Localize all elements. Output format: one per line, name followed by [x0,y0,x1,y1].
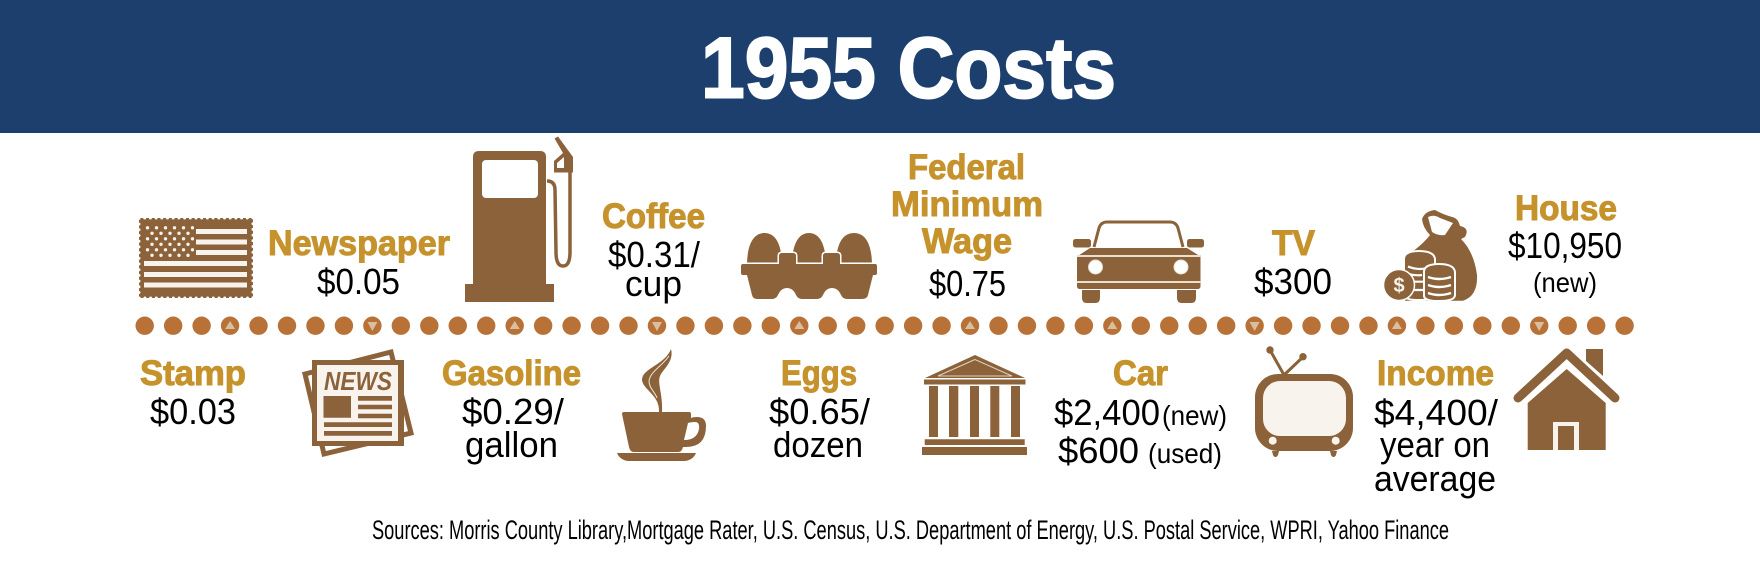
label: car: $600 [1058,430,1139,471]
label: federal minimum wage: Wage [922,222,1012,261]
icon text: dollar sign: $ [1394,275,1405,297]
label: gasoline: gallon [465,424,558,465]
label: house: (new) [1533,267,1597,298]
icon: house [1518,349,1615,450]
label: coffee: cup [625,263,682,304]
label: newspaper: Newspaper [268,224,450,263]
icon: newspaper [305,352,411,454]
title: 1955 Costs [701,20,1116,116]
label: income: average [1374,458,1496,499]
label: car: Car [1113,354,1168,393]
label: stamp: $0.03 [150,391,236,432]
label: TV: $300 [1254,261,1332,302]
icon: government building [922,355,1027,455]
label: house: House [1515,189,1617,228]
icon: gas pump [465,136,573,302]
label: TV [1254,224,1332,302]
label: eggs: dozen [773,424,863,465]
label: car [1054,354,1227,471]
icon text: news: NEWS [324,366,393,396]
label: house: $10,950 [1508,225,1622,266]
icon: stamp with flag [139,218,253,298]
dotted timeline [145,321,1625,331]
label: coffee [602,197,705,304]
label: newspaper [268,224,450,302]
label: car: (used) [1148,438,1222,469]
label: income: $4,400/ [1374,392,1498,433]
label: eggs [769,354,870,465]
label: gasoline [442,354,581,465]
label: stamp: Stamp [140,354,246,393]
label: federal minimum wage: $0.75 [929,263,1006,304]
timeline markers [225,321,1544,331]
label: gasoline: $0.29/ [462,391,564,432]
label: TV: TV [1272,224,1316,263]
label: coffee: $0.31/ [608,234,700,275]
label: income: Income [1377,354,1494,393]
icon: television [1255,346,1353,457]
icon: coffee cup [617,349,706,461]
label: federal minimum wage [891,148,1043,304]
label: federal minimum wage: Federal [908,148,1025,187]
label: eggs: $0.65/ [769,391,870,432]
title banner [0,0,1760,133]
label: income [1374,354,1498,499]
label: federal minimum wage: Minimum [891,185,1043,224]
label: gasoline: Gasoline [442,354,581,393]
label: income: year on [1380,424,1490,465]
label: car: $2,400 [1054,392,1160,433]
label: stamp [140,354,246,432]
label: newspaper: $0.05 [317,261,400,302]
label: eggs: Eggs [781,354,857,393]
label: house [1508,189,1622,298]
label: car: (new) [1162,400,1227,431]
icon: car [1073,222,1204,303]
icon: egg carton [741,233,877,299]
label: coffee: Coffee [602,197,705,236]
icon: money bag and coins [1384,210,1477,301]
